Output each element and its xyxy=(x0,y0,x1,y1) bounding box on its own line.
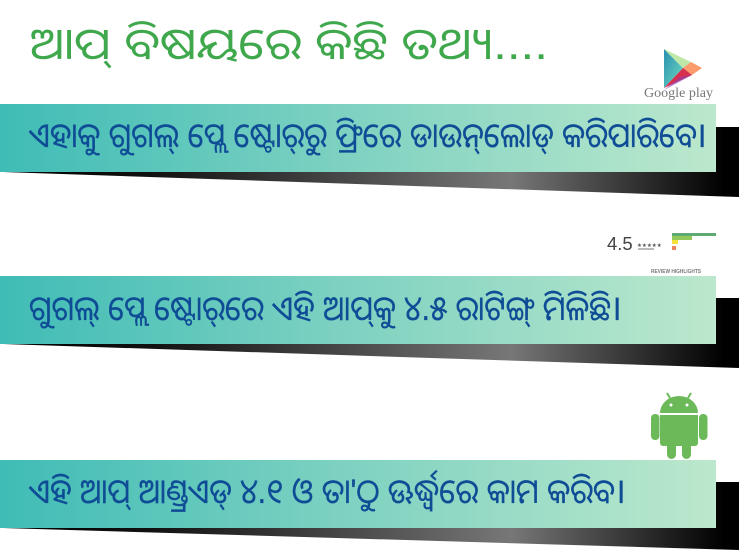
panel: android version xyxy=(0,460,739,550)
icon: android xyxy=(651,393,708,459)
band xyxy=(0,104,716,172)
icon: google play: Google play xyxy=(644,85,713,100)
panel: rating xyxy=(0,276,739,368)
rating widget xyxy=(607,233,716,275)
rating widget: REVIEW HIGHLIGHTS xyxy=(651,269,702,275)
band text: । xyxy=(613,290,621,328)
band text: । xyxy=(698,117,706,155)
band text: ଏହି ଆପ୍ ଆଣ୍ଡ୍ରଏଡ୍ ୪.୧ ଓ ତା'ଠୁ ଊର୍ଦ୍ଧ୍ୱରେ କାମ କରିବ xyxy=(28,469,615,512)
band shadow xyxy=(3,482,739,550)
icon: google play xyxy=(644,49,713,100)
panel: google play download xyxy=(0,104,739,197)
band text: । xyxy=(617,473,625,511)
band xyxy=(0,276,716,344)
band shadow xyxy=(3,298,739,368)
band xyxy=(0,460,716,528)
rating widget: 4.5 xyxy=(607,233,633,254)
title: ଆପ୍ ବିଷୟରେ କିଛି ତଥ୍ୟ.... xyxy=(30,20,548,69)
rating widget: ★★★★★ xyxy=(637,243,662,249)
band text: ଗୁଗଲ୍ ପ୍ଲେ ଷ୍ଟୋର୍‌ରେ ଏହି ଆପ୍‌କୁ ୪.୫ ରାଟିଙ୍ଗ୍ ମିଳିଛି xyxy=(29,290,611,329)
band shadow xyxy=(3,127,739,197)
